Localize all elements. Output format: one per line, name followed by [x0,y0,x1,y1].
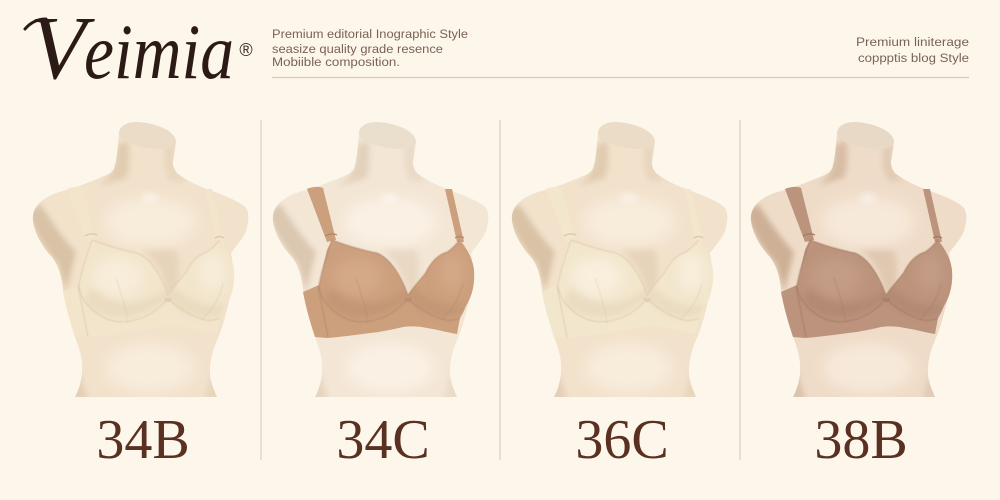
header text: left: seasize quality grade resence [272,42,443,56]
mannequin with ivory bra [28,122,248,400]
header text: left [272,27,468,69]
header text: left: Premium editorial Inographic Style [272,27,468,41]
mannequin with mocha bra [746,122,966,400]
mannequin with tan bra [268,122,488,400]
panel: 34C [268,122,488,471]
mannequin with cream bra [507,122,727,400]
header text: right [856,35,969,65]
logo: Veimia: ® [239,40,253,60]
header rule [272,76,969,78]
panel: 38B [746,122,966,471]
size label 34C: 34C [336,409,430,471]
size label 34B: 34B [96,409,190,471]
logo: Veimia: V [30,0,95,98]
panel: 36C [507,122,727,471]
header text: right: Premium liniterage [856,35,969,49]
logo: Veimia [25,0,253,98]
header text: right: coppptis blog Style [858,51,969,65]
size label 38B: 38B [814,409,908,471]
panel: 34B [28,122,248,471]
size label 36C: 36C [575,409,669,471]
header text: left: Mobiible composition. [272,55,400,69]
logo: Veimia: eimia [84,8,234,95]
